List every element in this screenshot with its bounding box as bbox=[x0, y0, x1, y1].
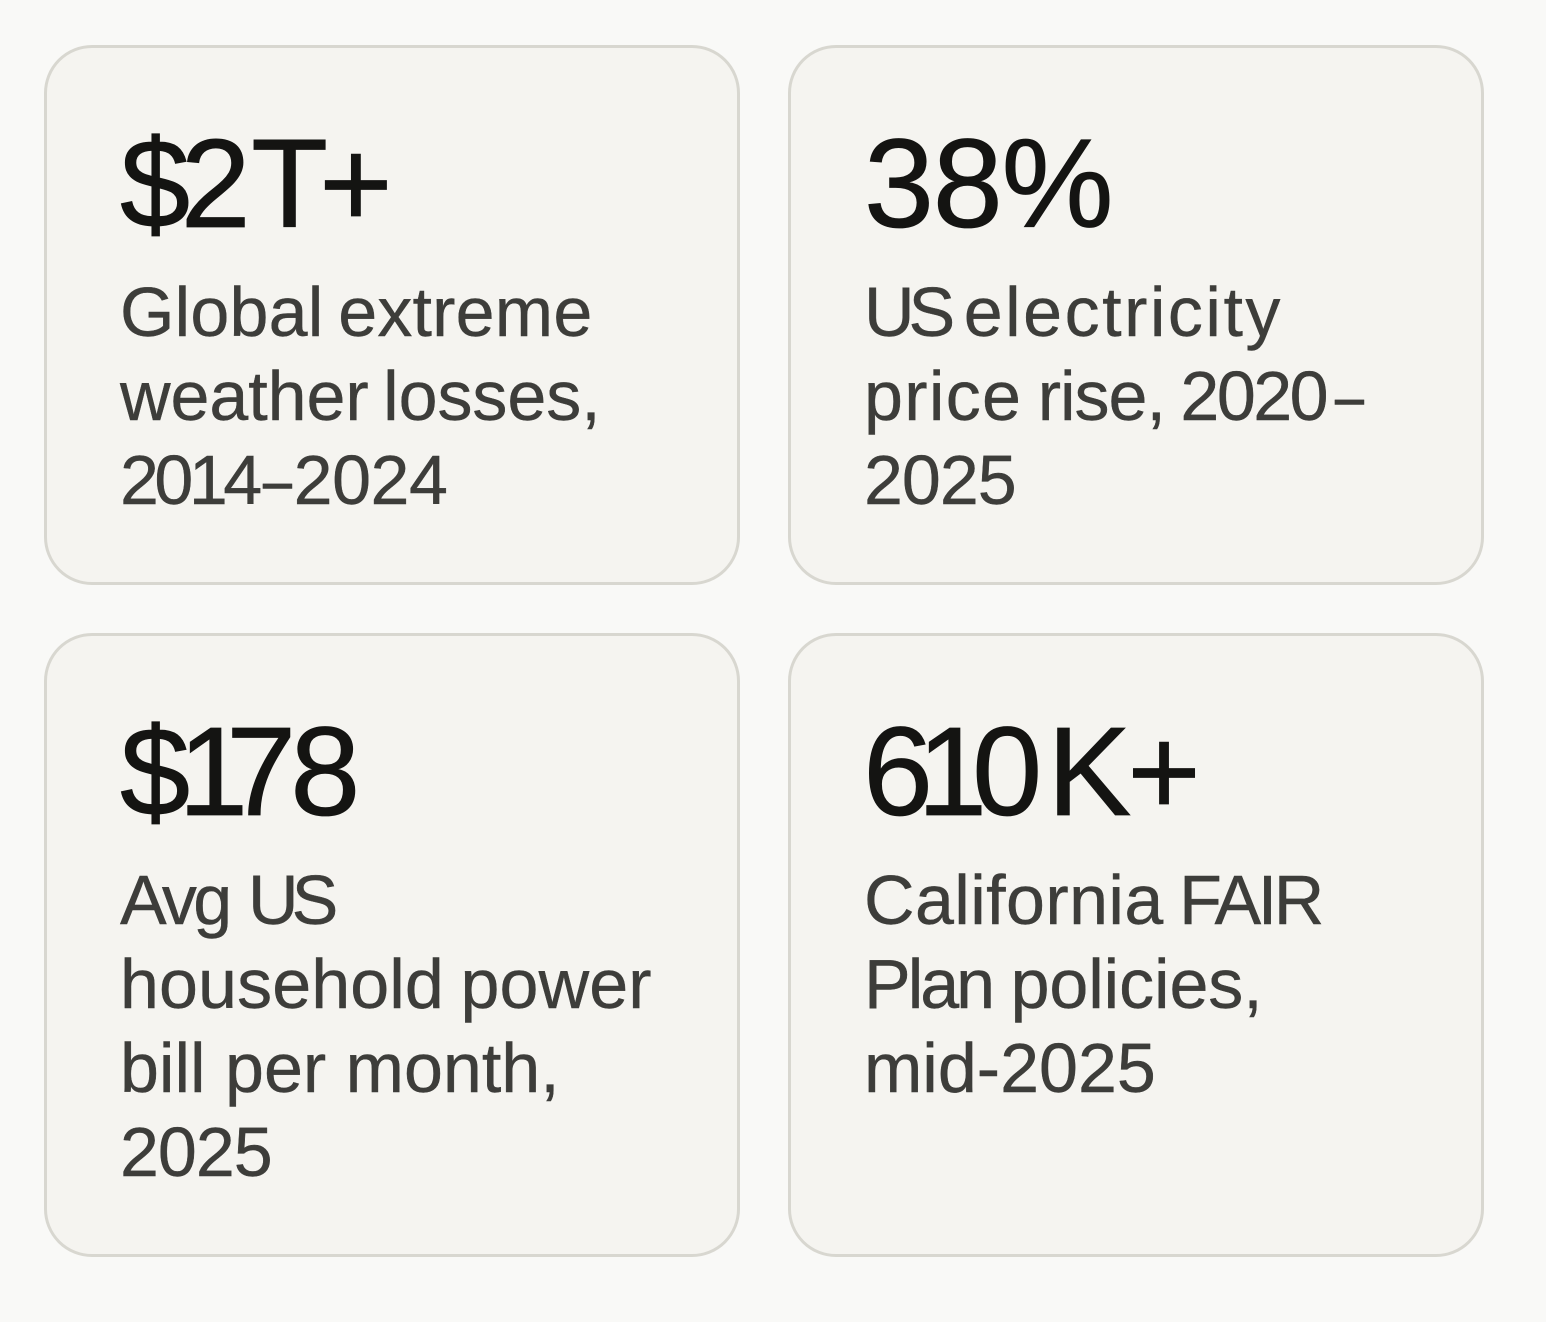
panel: global extreme weather losses bbox=[44, 45, 740, 585]
label: average US household power bill: 2025 bbox=[120, 1113, 272, 1191]
label: global extreme weather losses: weather losses, bbox=[120, 357, 601, 435]
label: US electricity price rise: 2025 bbox=[864, 441, 1016, 519]
stat: 38%: 38% bbox=[864, 113, 1112, 254]
label: average US household power bill: household power bbox=[120, 945, 652, 1023]
panel: US electricity price rise bbox=[788, 45, 1484, 585]
label: California FAIR Plan policies: California FAIR bbox=[864, 861, 1321, 939]
stat: 610K+: 610K+ bbox=[863, 701, 1201, 842]
label: US electricity price rise: US electricity bbox=[864, 273, 1283, 351]
stat: $178: $178 bbox=[120, 701, 360, 842]
label: average US household power bill bbox=[120, 861, 652, 1191]
label: California FAIR Plan policies: mid-2025 bbox=[864, 1029, 1156, 1107]
label: average US household power bill: bill per month, bbox=[120, 1029, 560, 1107]
panel: average US household power bill bbox=[44, 633, 740, 1257]
label: global extreme weather losses: 2014 2024 bbox=[120, 441, 447, 519]
panel: California FAIR Plan policies bbox=[788, 633, 1484, 1257]
label: California FAIR Plan policies: Plan policies, bbox=[864, 945, 1263, 1023]
label: US electricity price rise: – bbox=[1335, 357, 1364, 435]
label: global extreme weather losses: – bbox=[263, 441, 292, 519]
label: US electricity price rise bbox=[864, 273, 1364, 519]
stat: $2T+: $2T+ bbox=[120, 113, 393, 254]
label: California FAIR Plan policies bbox=[864, 861, 1322, 1107]
label: average US household power bill: Avg US bbox=[120, 861, 331, 939]
label: global extreme weather losses bbox=[120, 273, 601, 519]
label: US electricity price rise: price rise, 2020 bbox=[864, 357, 1326, 435]
label: global extreme weather losses: Global extreme bbox=[120, 273, 592, 351]
